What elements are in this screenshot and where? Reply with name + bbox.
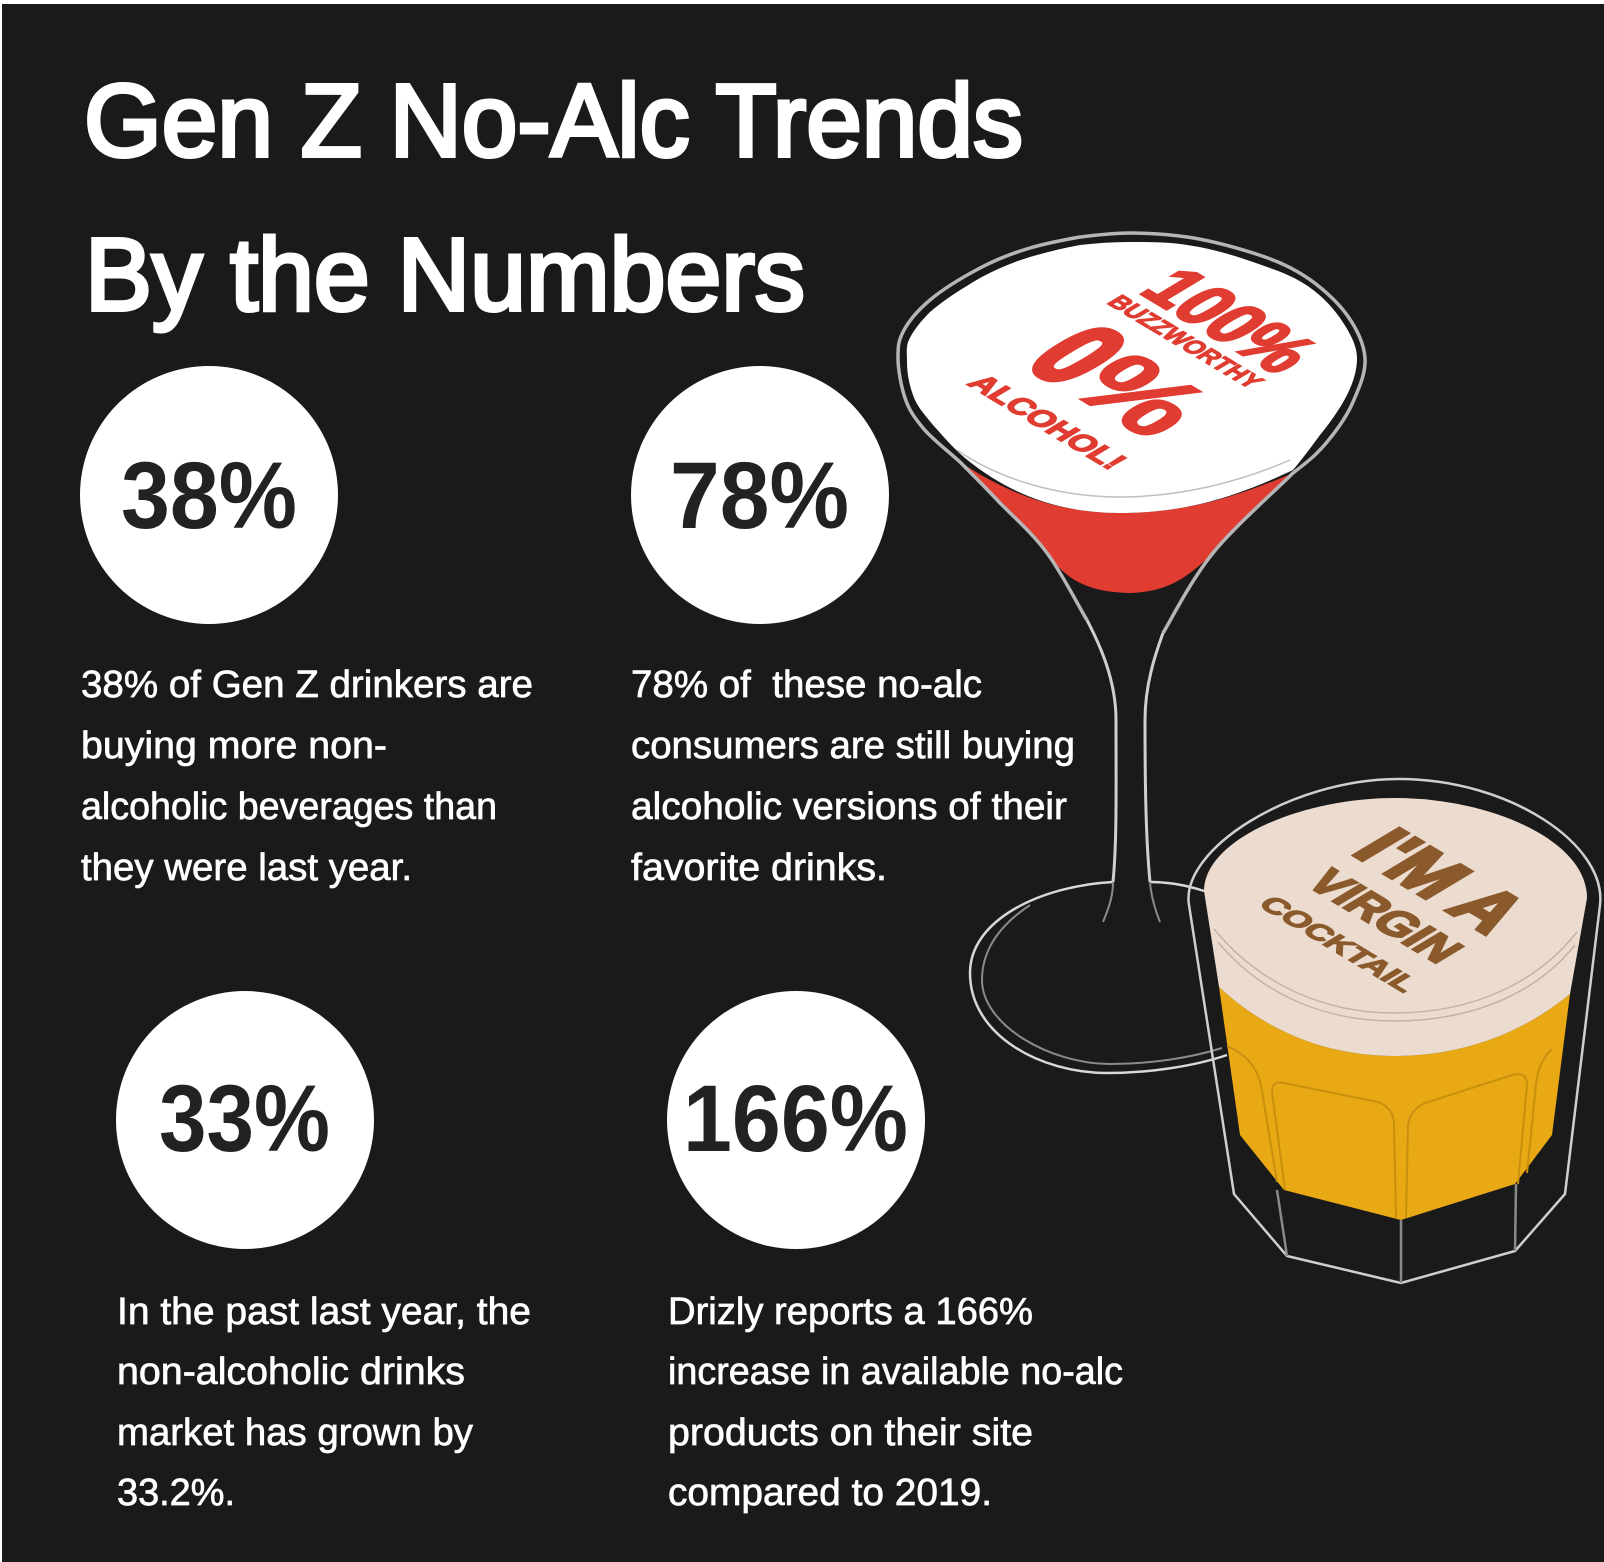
title: [84, 63, 1023, 332]
label: I'm a virgin cocktail: [1251, 818, 1545, 997]
text: 166% description: Drizly reports a 166%: [668, 1291, 1033, 1333]
stat circle: 38%: [80, 366, 338, 624]
amber drink: [1219, 987, 1570, 1220]
glass bowl outline: [898, 233, 1365, 633]
text: 38% description: they were last year.: [81, 847, 412, 889]
text: 166% description: [668, 1291, 1123, 1514]
stat circle: 78%: 78%: [670, 443, 849, 549]
stat circle: 166%: [667, 991, 925, 1249]
text: 78% description: favorite drinks.: [631, 847, 887, 889]
stat circle: 78%: [631, 366, 889, 624]
icon: martini glass: [898, 233, 1365, 1073]
text: 38% description: [81, 664, 533, 889]
stat circle: 33%: 33%: [159, 1066, 330, 1172]
label: 100% buzzworthy 0% alcohol: BUZZWORTHY: [1101, 292, 1269, 393]
glass stem: [1087, 620, 1163, 882]
stat: 166%: [667, 991, 1123, 1514]
text: 33% description: market has grown by: [117, 1412, 473, 1454]
stat: 33%: [116, 991, 531, 1514]
icon: tumbler glass: [1188, 779, 1600, 1283]
text: 78% description: 78% of these no-alc: [631, 664, 982, 706]
foam: [1204, 798, 1587, 1056]
label: 100% buzzworthy 0% alcohol: ALCOHOL!: [960, 370, 1134, 474]
text: 78% description: alcoholic versions of their: [631, 786, 1067, 828]
label: 100% buzzworthy 0% alcohol: 0: [1000, 308, 1156, 402]
label: I'm a virgin cocktail: COCKTAIL: [1251, 892, 1426, 997]
stat circle: 166%: 166%: [683, 1066, 908, 1172]
stat circle: 38%: 38%: [121, 443, 297, 549]
stat circle: 33%: [116, 991, 374, 1249]
label: I'm a virgin cocktail: VIRGIN: [1295, 862, 1475, 970]
text: 33% description: [117, 1291, 531, 1514]
glass base: [970, 882, 1227, 1073]
text: 78% description: [631, 664, 1075, 889]
white foam top: [907, 242, 1357, 513]
text: 166% description: increase in available no-alc: [668, 1351, 1123, 1393]
text: 166% description: products on their site: [668, 1412, 1033, 1454]
title: By the Numbers: [85, 217, 805, 332]
text: 166% description: compared to 2019.: [668, 1472, 992, 1514]
label: 100% buzzworthy 0% alcohol: 100%: [1123, 257, 1336, 384]
text: 38% description: 38% of Gen Z drinkers are: [81, 664, 533, 706]
stat: 78%: [631, 366, 1075, 889]
amber facets: [1227, 1046, 1552, 1218]
stat: 38%: [80, 366, 533, 889]
text: 38% description: buying more non-: [81, 725, 387, 767]
text: 33% description: non-alcoholic drinks: [117, 1351, 465, 1393]
label: I'm a virgin cocktail: I'M A: [1335, 818, 1545, 944]
text: 33% description: 33.2%.: [117, 1472, 235, 1514]
tumbler outline: [1188, 779, 1600, 1283]
label: 100% buzzworthy 0% alcohol: %: [1044, 337, 1238, 454]
text: 33% description: In the past last year, the: [117, 1291, 531, 1333]
label: 100% buzzworthy 0% alcohol: [960, 257, 1336, 474]
red drink: [960, 462, 1293, 593]
text: 38% description: alcoholic beverages than: [81, 786, 497, 828]
text: 78% description: consumers are still buying: [631, 725, 1075, 767]
title: Gen Z No-Alc Trends: [84, 63, 1023, 178]
